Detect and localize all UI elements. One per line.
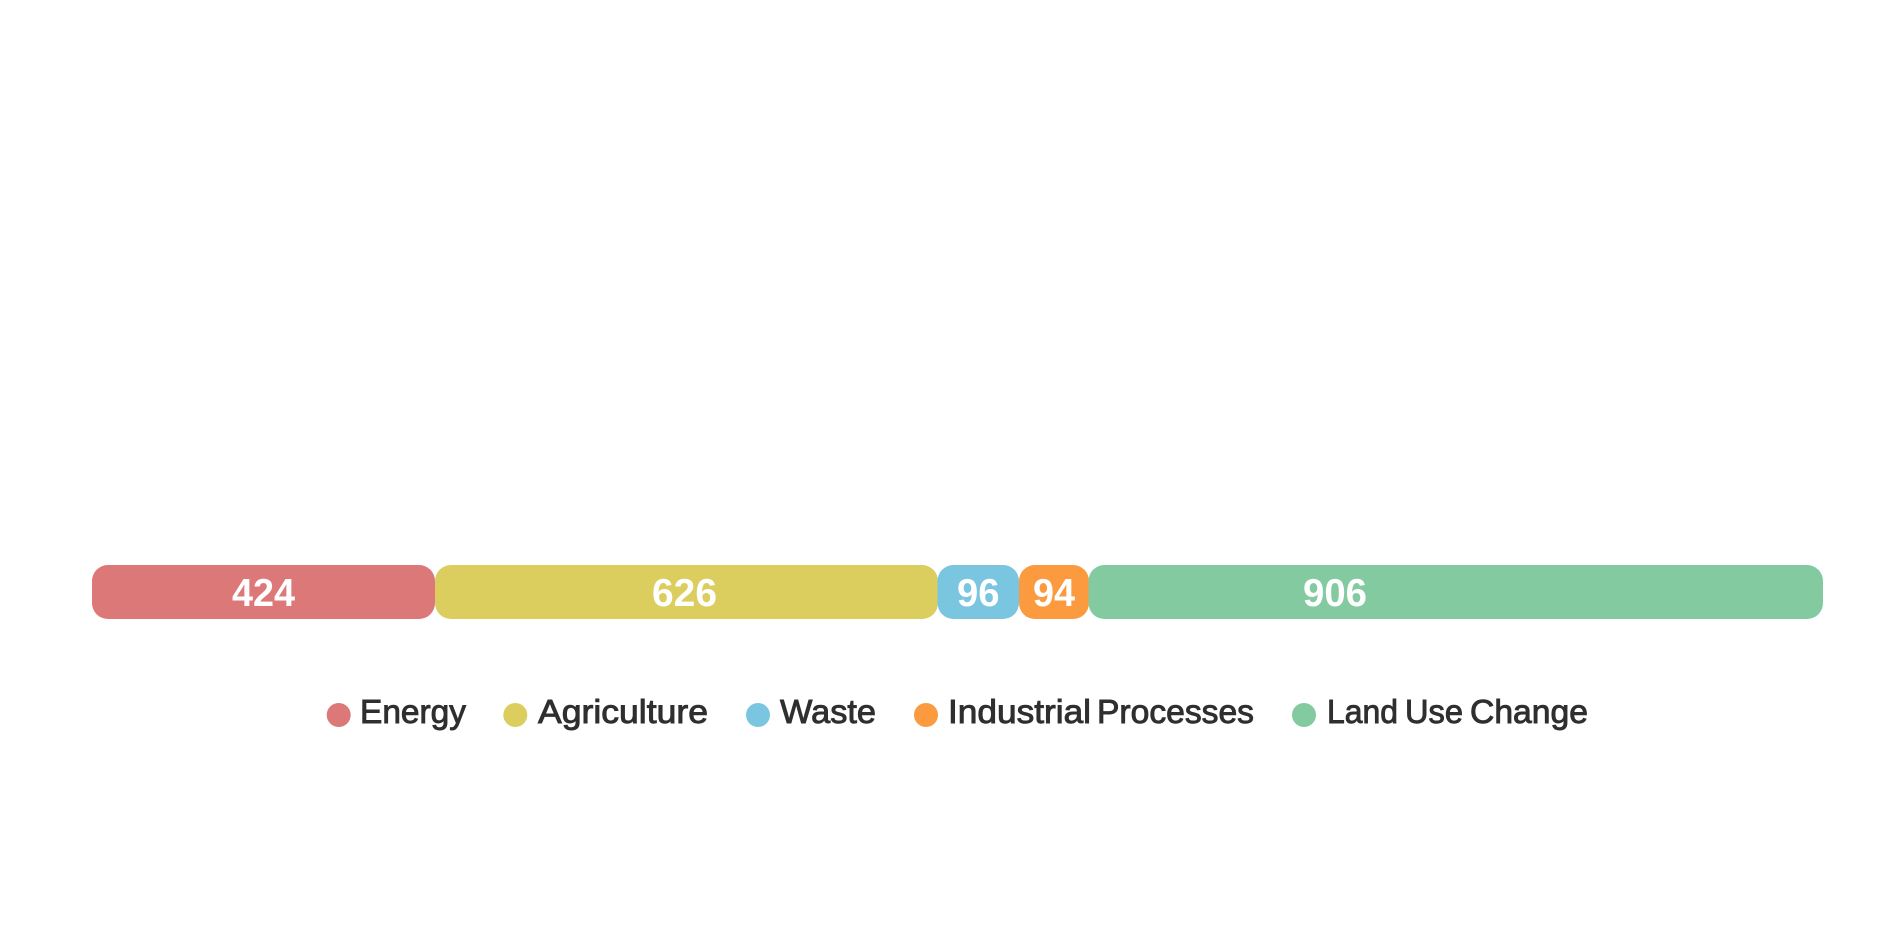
segment: Agriculture 626	[435, 565, 938, 619]
segment: Energy 424	[92, 565, 435, 619]
legend item: Land Use Change	[1292, 693, 1588, 730]
legend item: Land Use Change: Land	[1327, 693, 1398, 730]
legend item: Industrial Processes: Processes	[1097, 693, 1254, 730]
legend item: Industrial Processes	[914, 693, 1254, 730]
segment: Waste 96: 96	[957, 572, 1000, 615]
stacked bar chart	[92, 565, 1823, 619]
legend	[327, 693, 1588, 730]
legend item: Land Use Change: Change	[1470, 693, 1588, 730]
segment: Land Use Change 906: 906	[1303, 572, 1367, 615]
legend item: Industrial Processes: Industrial	[948, 693, 1091, 730]
legend item: Land Use Change: Use	[1405, 693, 1463, 730]
legend item: Agriculture: Agriculture	[538, 693, 708, 730]
segment: Industrial Processes 94	[1019, 565, 1089, 619]
legend item: Energy: Energy	[360, 693, 467, 730]
segment: Energy 424: 424	[232, 572, 295, 615]
segment: Land Use Change 906	[1088, 565, 1823, 619]
legend item: Waste: Waste	[780, 693, 876, 730]
segment: Waste 96	[938, 565, 1019, 619]
segment: Industrial Processes 94: 94	[1033, 572, 1075, 615]
segment: Agriculture 626: 626	[652, 572, 717, 615]
